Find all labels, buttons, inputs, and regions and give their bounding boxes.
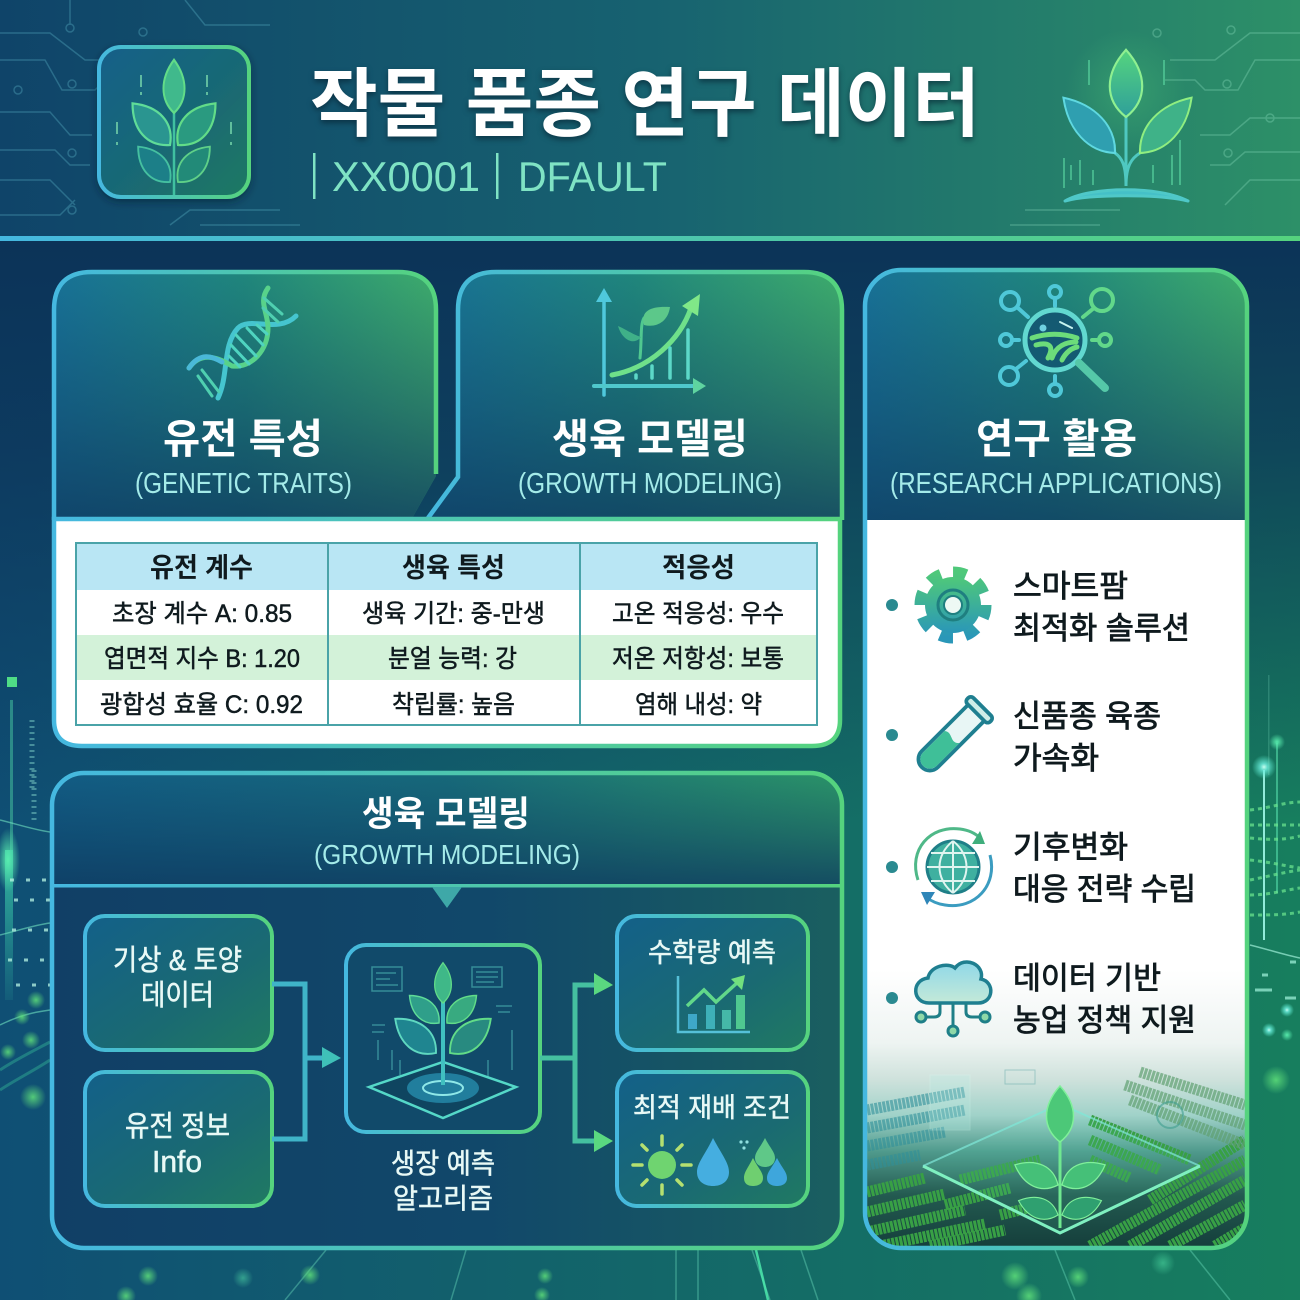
- column: growth traits: 분얼 능력: 강: [388, 645, 517, 673]
- column: growth traits: 생육 기간: 중-만생: [362, 600, 545, 628]
- list item: data policy: [886, 961, 1196, 1038]
- arrow: inputs to algorithm: [272, 984, 341, 1139]
- icon: nutrient drops: [739, 1138, 787, 1186]
- box: optimal cultivation: 최적 재배 조건: [633, 1093, 791, 1123]
- icon: growth chart: [594, 288, 706, 395]
- subtitle: DFAULT: [518, 153, 667, 200]
- box: genetic info: [85, 1072, 272, 1206]
- arrow: algorithm to outputs: [540, 973, 613, 1152]
- icon: yield chart: [678, 975, 750, 1032]
- icon: water drop: [697, 1138, 729, 1186]
- panel header background: [867, 272, 1245, 530]
- panel: growth modeling workflow: [52, 773, 842, 1248]
- panel background: [54, 272, 436, 520]
- column: adaptability: 저온 저항성: 보통: [612, 645, 784, 673]
- column: genetic coefficients: 엽면적 지수 B: 1.20: [104, 645, 300, 673]
- title: 작물 품종 연구 데이터: [310, 62, 980, 146]
- left data streaks: [0, 677, 50, 1110]
- list item: smart farm: [886, 569, 1190, 646]
- icon: DNA helix: [189, 288, 296, 398]
- column: genetic coefficients: [100, 553, 303, 719]
- circuit traces right: [1010, 26, 1300, 225]
- box: weather and soil data: [85, 916, 272, 1050]
- panel: genetic traits: [54, 272, 436, 520]
- list item: new breed: [886, 695, 1161, 779]
- icon: header sprout: [1053, 30, 1202, 201]
- column: growth traits: 생육 특성: [402, 553, 505, 583]
- panel: trait table card: [54, 519, 840, 746]
- box: yield prediction: 수학량 예측: [648, 938, 776, 968]
- box: growth algorithm: [346, 945, 540, 1132]
- column: adaptability: [612, 553, 784, 719]
- panel background: [426, 272, 842, 520]
- column: adaptability: 적응성: [662, 553, 735, 583]
- column: genetic coefficients: 초장 계수 A: 0.85: [112, 600, 292, 628]
- panel: growth modeling: [426, 272, 842, 520]
- column: genetic coefficients: 광합성 효율 C: 0.92: [100, 691, 303, 719]
- column: growth traits: [362, 553, 545, 719]
- list item: smart farm: 스마트팜: [1013, 569, 1128, 604]
- heading: 연구 활용: [976, 416, 1137, 462]
- subtitle: XX0001: [332, 153, 480, 200]
- list item: smart farm: 최적화 솔루션: [1013, 611, 1190, 646]
- icon: sun: [633, 1136, 691, 1194]
- list item: climate: 기후변화: [1013, 830, 1128, 865]
- column: adaptability: 고온 적응성: 우수: [612, 600, 784, 628]
- header divider: [0, 236, 1300, 241]
- table: [76, 543, 817, 725]
- panel border: [865, 270, 1247, 1248]
- label: growth algorithm: 알고리즘: [393, 1183, 493, 1214]
- label: growth algorithm: [391, 1148, 495, 1214]
- header band: [0, 0, 1300, 238]
- list item: data policy: 농업 정책 지원: [1013, 1003, 1196, 1038]
- list item: climate: 대응 전략 수립: [1013, 872, 1196, 907]
- column: genetic coefficients: 유전 계수: [150, 553, 253, 583]
- label: growth algorithm: 생장 예측: [391, 1148, 495, 1179]
- icon: magnifier network: [1000, 286, 1113, 396]
- heading: 생육 모델링: [552, 416, 748, 462]
- list item: climate: [886, 829, 1196, 907]
- panel background: [52, 773, 842, 1248]
- list item: new breed: 신품종 육종: [1013, 699, 1161, 734]
- box: yield prediction: [617, 916, 808, 1050]
- list item: new breed: 가속화: [1013, 741, 1099, 776]
- illustration: smart field: [867, 1070, 1245, 1246]
- list item: data policy: 데이터 기반: [1013, 961, 1161, 996]
- circuit traces left: [0, 0, 300, 225]
- white list area: [867, 520, 1245, 1246]
- heading: 생육 모델링: [362, 795, 530, 834]
- column: adaptability: 염해 내성: 약: [635, 691, 762, 719]
- subheading: (GROWTH MODELING): [314, 839, 580, 870]
- subtitle: [313, 153, 667, 200]
- subheading: (RESEARCH APPLICATIONS): [890, 468, 1222, 500]
- pointer: [432, 887, 462, 908]
- icon: plant in rounded box: [99, 47, 249, 197]
- bottom data streaks: [116, 1250, 1230, 1300]
- box: genetic info: 유전 정보: [125, 1111, 230, 1143]
- panel: research applications: [865, 270, 1247, 1248]
- subheading: (GENETIC TRAITS): [135, 468, 352, 500]
- column: growth traits: 착립률: 높음: [392, 691, 515, 719]
- heading: 유전 특성: [163, 416, 323, 462]
- box: genetic info: Info: [152, 1144, 202, 1179]
- box: optimal cultivation: [617, 1072, 808, 1206]
- right data streaks: [1250, 675, 1300, 1094]
- subheading: (GROWTH MODELING): [518, 468, 782, 500]
- box: weather and soil data: 데이터: [141, 979, 214, 1012]
- box: weather and soil data: 기상 & 토양: [113, 945, 242, 977]
